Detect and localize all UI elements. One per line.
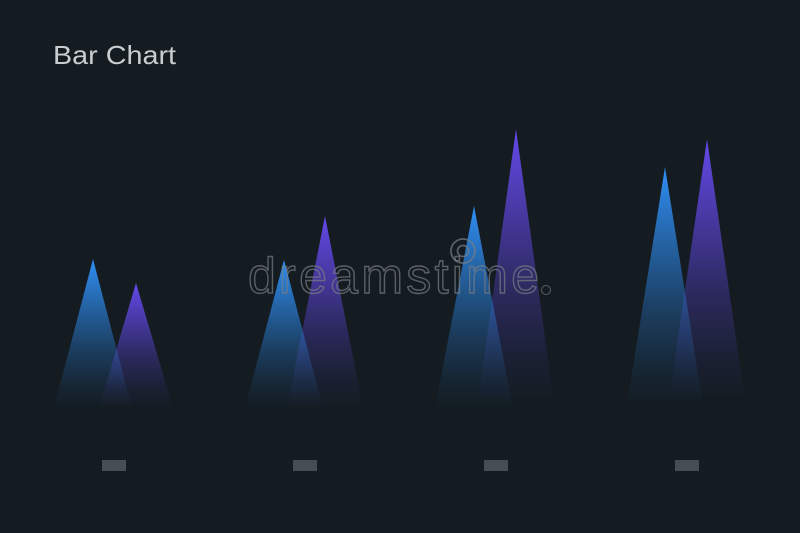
group 4 bars bbox=[627, 139, 745, 405]
watermark: dreamstime bbox=[248, 248, 539, 304]
title: Bar Chart bbox=[53, 40, 177, 70]
axis label placeholders bbox=[102, 460, 699, 471]
group 1 bars bbox=[54, 259, 173, 408]
group 3 bars bbox=[435, 129, 554, 408]
group 2 bars bbox=[245, 216, 363, 408]
